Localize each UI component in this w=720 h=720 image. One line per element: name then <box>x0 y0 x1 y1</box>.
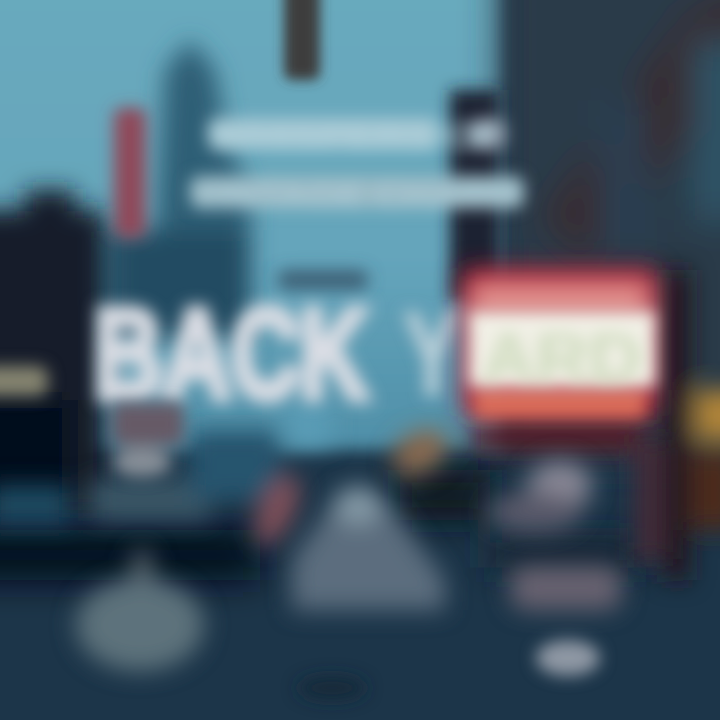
dark street band <box>0 470 640 580</box>
blurred text block: right bubble <box>510 566 622 610</box>
blurred text block: left column top <box>112 402 184 477</box>
small dark road mark <box>298 676 366 700</box>
blurred text block: small bright label <box>536 640 600 676</box>
red vertical sign <box>114 108 146 238</box>
blurred text block: centre bubble <box>292 486 445 610</box>
blurred text block: right top <box>487 461 592 532</box>
title: second line: VINTAGE CHARM <box>192 177 522 215</box>
left yellow sign <box>0 366 48 396</box>
right buildings <box>500 0 720 460</box>
left buildings <box>0 40 250 510</box>
traffic light <box>284 0 320 80</box>
headline: Y: Y <box>404 289 460 419</box>
vehicles and street haze <box>0 270 720 580</box>
blurred text block: left bubble <box>76 550 204 671</box>
dark tower right of the sky <box>450 90 500 300</box>
title: first line: WHISPERS OF <box>212 118 502 156</box>
headline: BACK: BACK <box>94 283 368 426</box>
marquee lettering: ARD <box>482 319 642 397</box>
small dark label above headline <box>278 270 368 290</box>
red marquee sign <box>462 268 658 418</box>
